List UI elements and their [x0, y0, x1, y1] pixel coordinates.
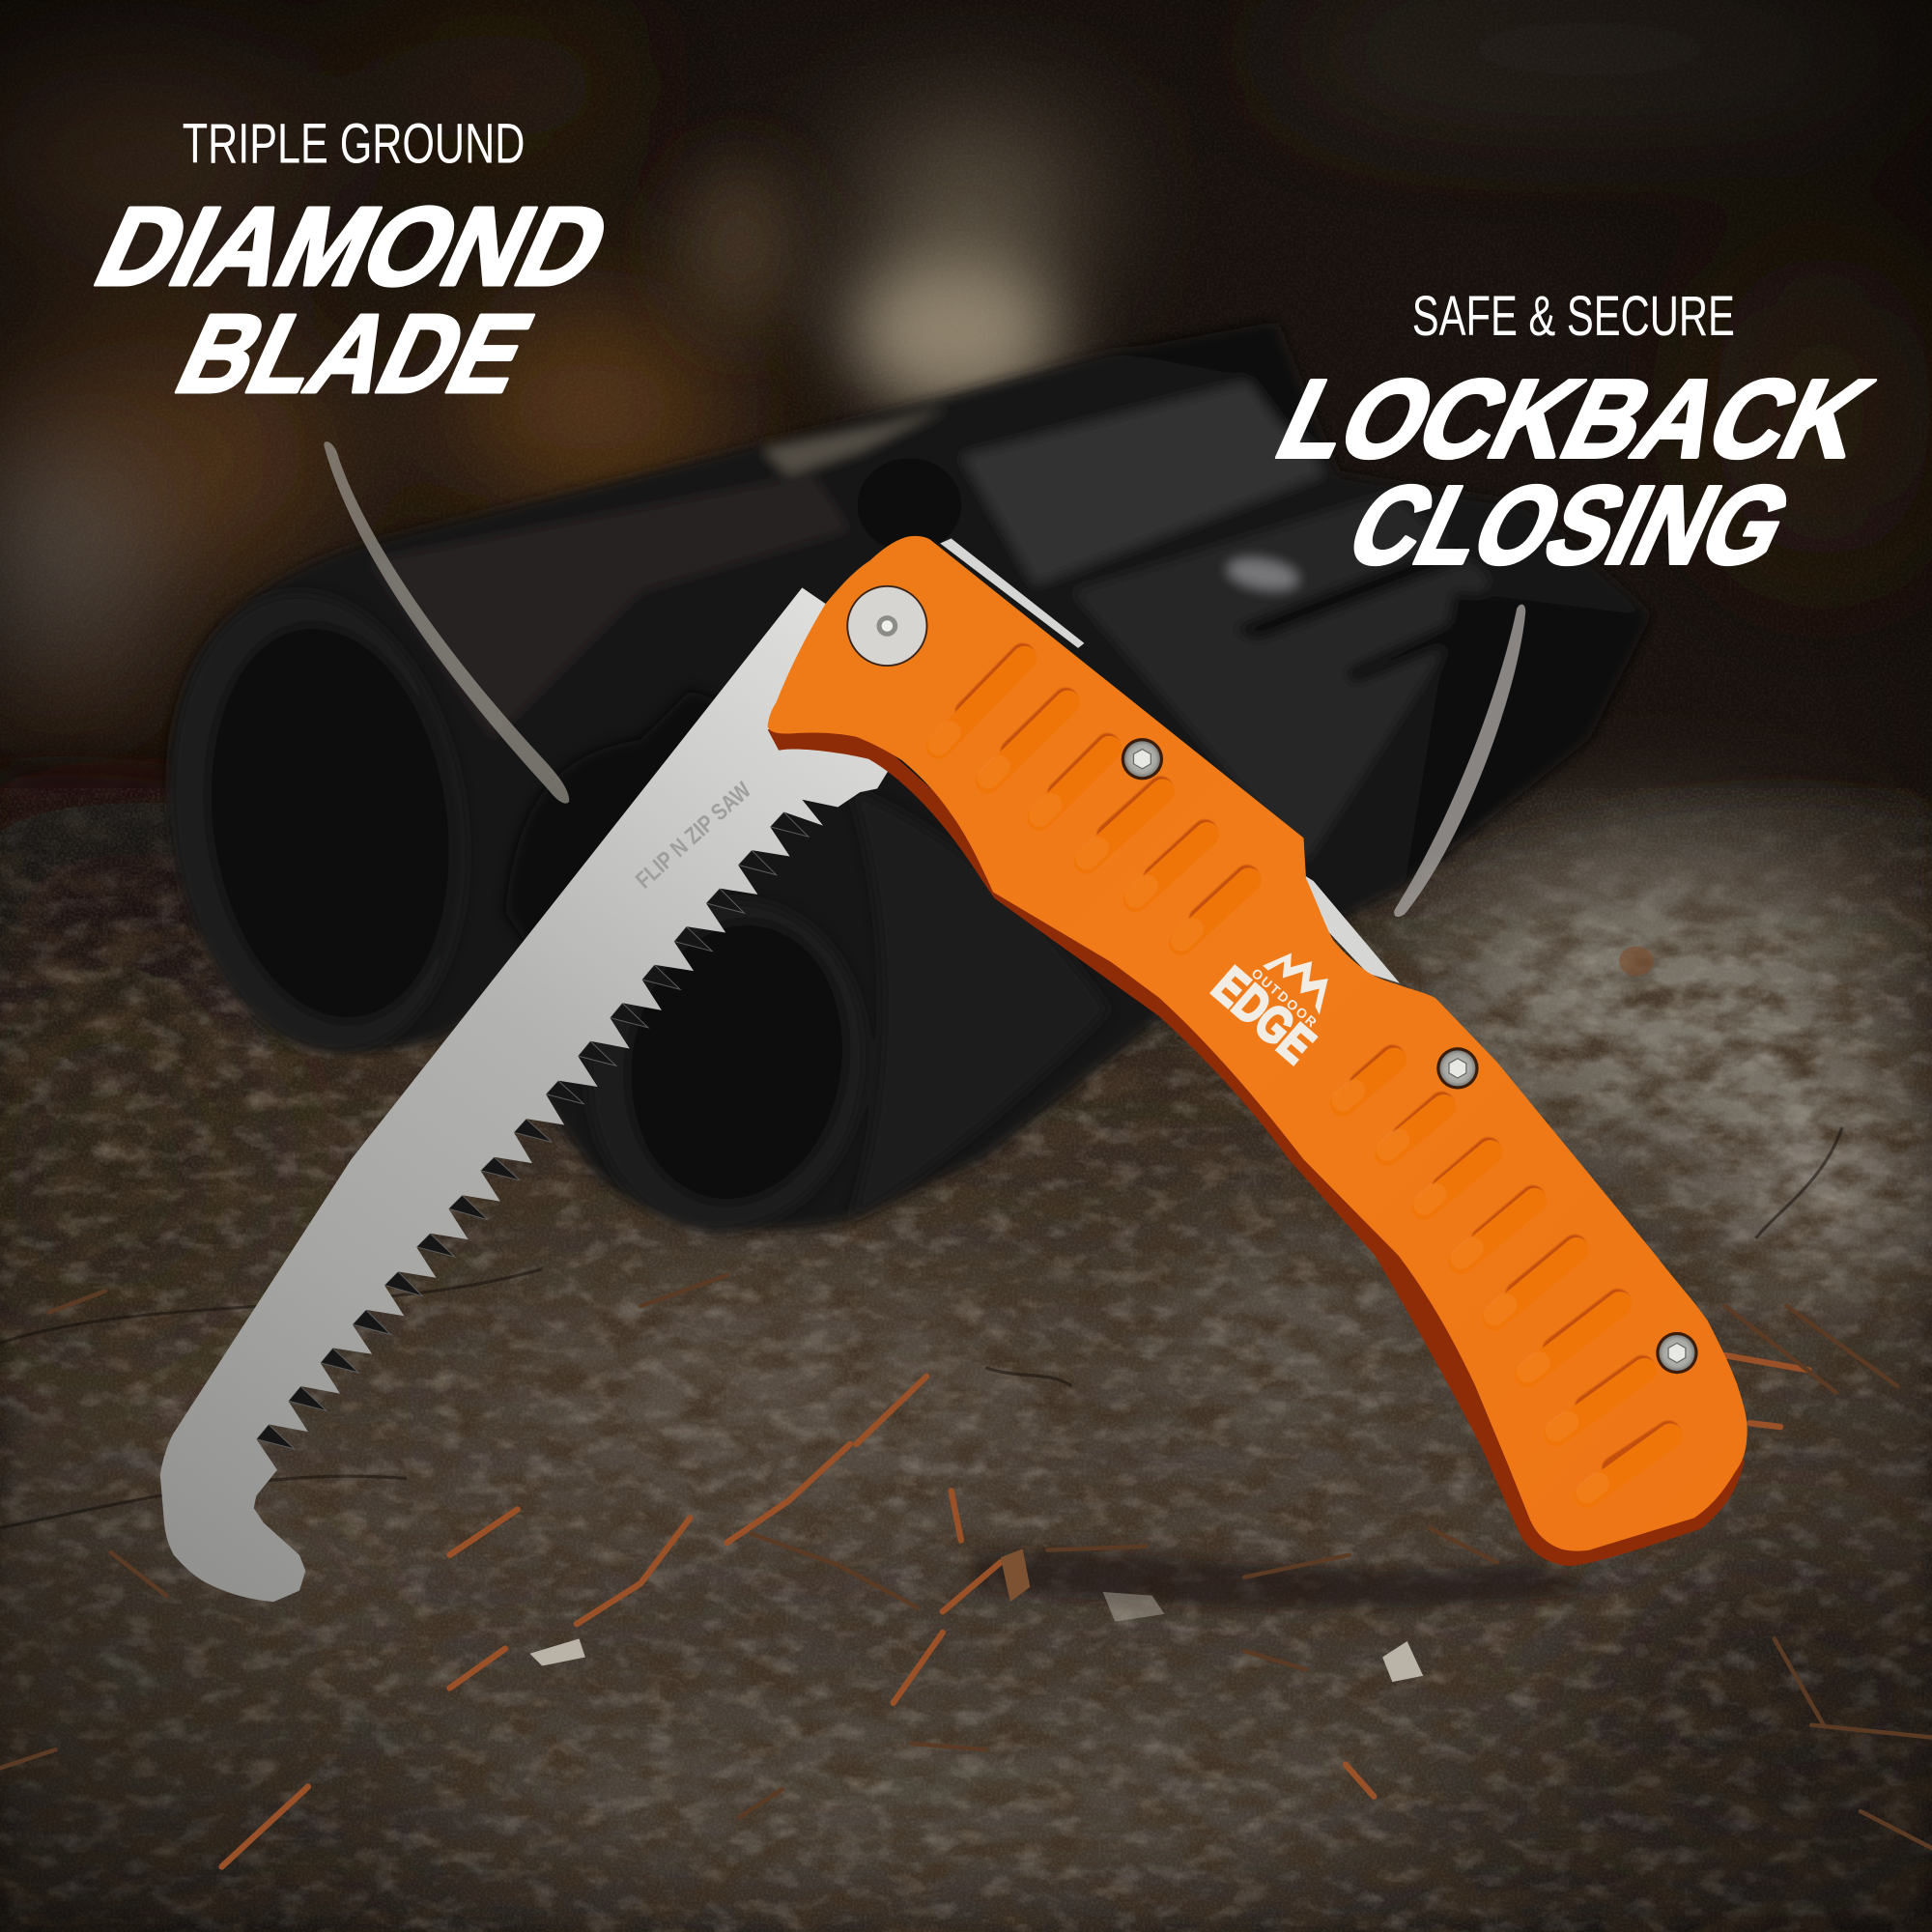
- saw blade: [160, 587, 894, 1602]
- background: tree stump surface: [0, 739, 1932, 1932]
- handle screw 2: [1436, 1047, 1479, 1090]
- binoculars: [142, 323, 1651, 1254]
- handle grip grooves: [938, 656, 1670, 1496]
- orange handle: [768, 536, 1747, 1551]
- Outdoor Edge logo: EDGE: [1202, 957, 1324, 1074]
- heading: lockback: LOCKBACK: [1260, 356, 1889, 481]
- heading: blade: BLADE: [159, 292, 550, 415]
- Outdoor Edge logo: OUTDOOR: [1248, 965, 1321, 1032]
- callout: safe and secure lockback closing: [1260, 285, 1889, 587]
- callout line: lockback closing: [1394, 605, 1525, 917]
- handle shadow edge: [768, 727, 1745, 1566]
- folding saw: [160, 536, 1747, 1602]
- callout: triple ground diamond blade: [78, 112, 629, 415]
- heading: closing: CLOSING: [1330, 463, 1810, 587]
- handle screw 1: [1122, 738, 1163, 780]
- heading: diamond: DIAMOND: [78, 185, 629, 308]
- callout line: diamond blade: [324, 441, 569, 804]
- subheading: triple ground: TRIPLE GROUND: [183, 112, 525, 175]
- Outdoor Edge logo: [1202, 923, 1354, 1074]
- blade engraving: FLIP N ZIP SAW: [631, 778, 756, 894]
- dark debris band at handle base: [974, 1550, 1602, 1609]
- pivot screw: [846, 585, 927, 667]
- blade tang behind handle: [940, 538, 1400, 983]
- handle screw 3: [1656, 1332, 1698, 1374]
- pine needles and wood debris: [0, 947, 1932, 1866]
- subheading: safe and secure: SAFE & SECURE: [1412, 285, 1735, 348]
